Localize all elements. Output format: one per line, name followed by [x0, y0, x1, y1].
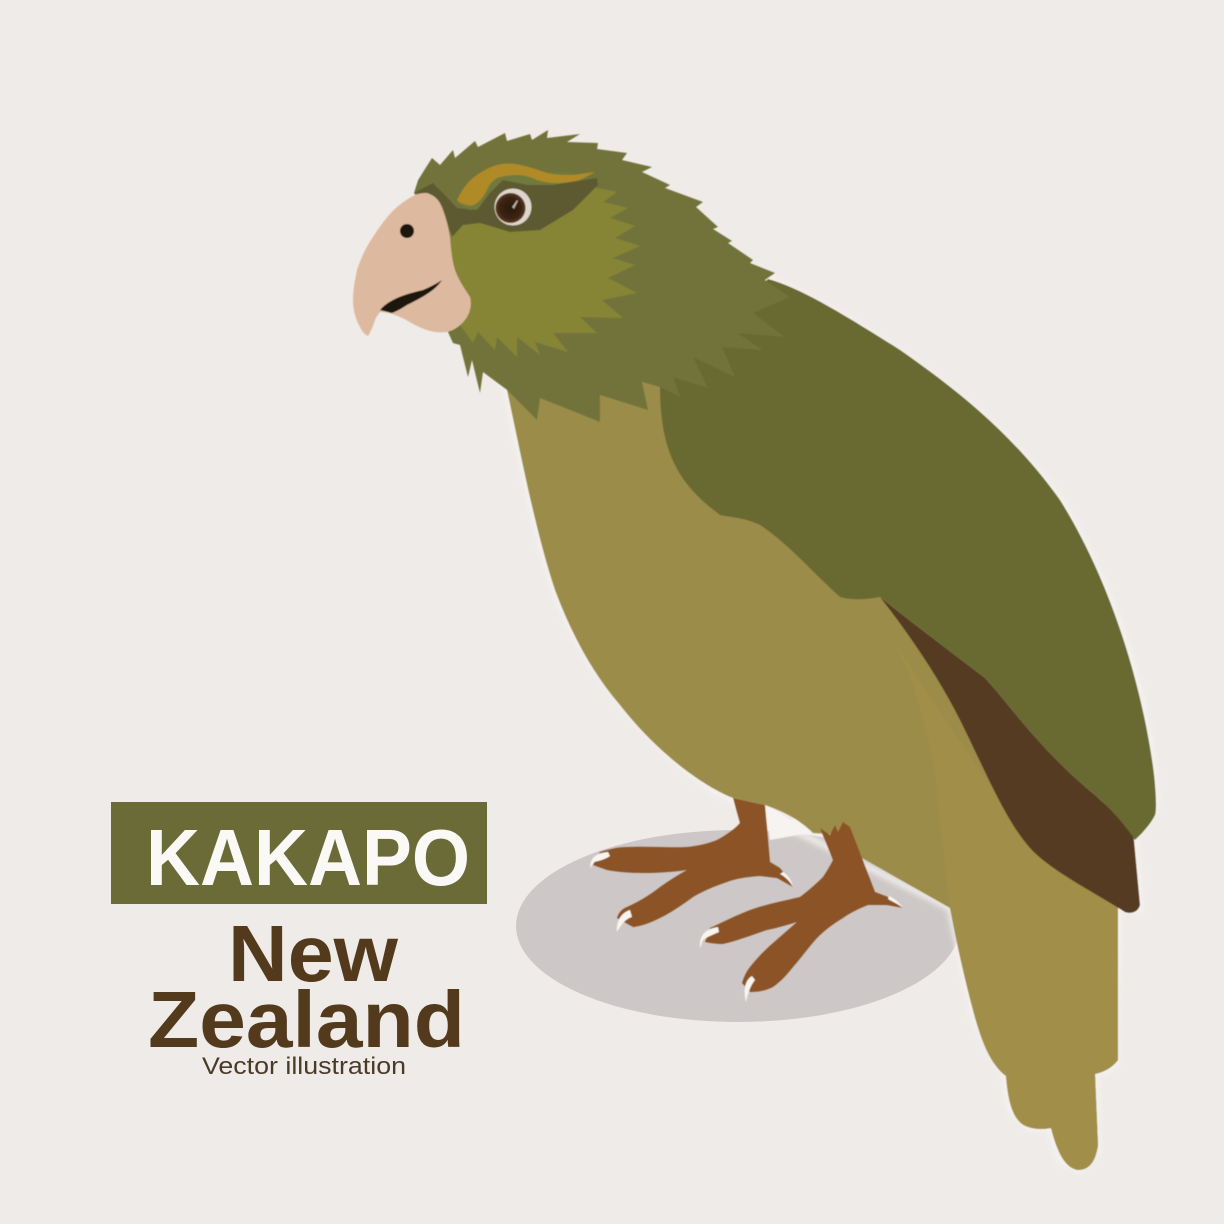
- ground shadow: [516, 830, 960, 1022]
- wing: [660, 279, 1156, 840]
- left foot: [593, 798, 793, 927]
- banner box: [111, 802, 487, 904]
- caption: Vector illustration: [202, 1053, 406, 1080]
- eye highlight: [512, 200, 518, 209]
- right leg and foot: [700, 822, 903, 1002]
- right foot claws: [700, 896, 903, 1002]
- body halo: [420, 150, 1155, 1170]
- heading: New: New: [228, 909, 399, 998]
- eye mask: [414, 178, 598, 237]
- left foot claws: [590, 852, 793, 932]
- right foot: [705, 822, 903, 992]
- eye: [494, 188, 532, 226]
- title banner: [111, 802, 487, 904]
- strip above eye: [456, 170, 590, 210]
- iris: [496, 193, 526, 223]
- brown under-wing feathers: [880, 597, 1140, 913]
- banner title: KAKAPO: [146, 813, 470, 902]
- beak mouth line: [380, 280, 442, 313]
- nostril: [400, 224, 414, 238]
- white leg feathers: [765, 805, 815, 840]
- lower body and tail: [507, 382, 1118, 1170]
- left leg and foot: [590, 798, 815, 932]
- kakapo bird illustration: [353, 130, 1156, 1170]
- heading: Zealand: Zealand: [148, 975, 465, 1064]
- tail highlight: [893, 640, 1118, 1170]
- beak: [353, 193, 471, 336]
- eye ring: [494, 188, 532, 226]
- face feathers: [450, 185, 640, 357]
- orange eyebrow: [457, 164, 595, 206]
- head and neck feathers: [414, 130, 790, 422]
